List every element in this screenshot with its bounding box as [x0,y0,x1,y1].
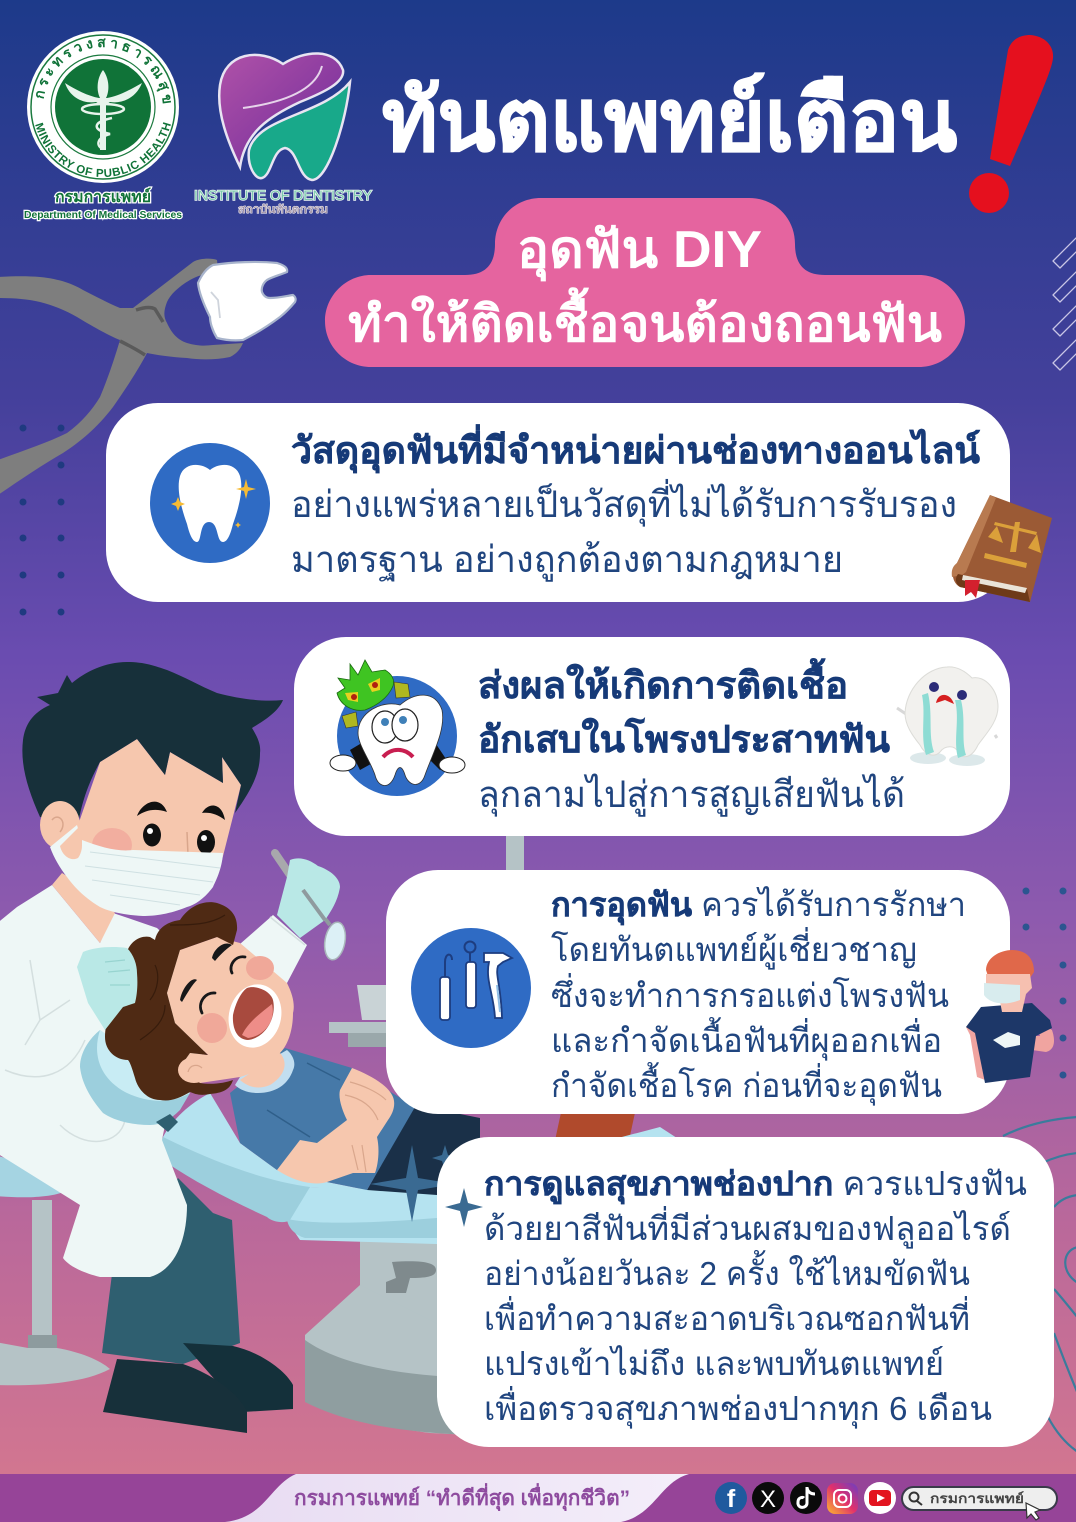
mirror tool [275,853,348,961]
subtitle banner: อุดฟัน DIY [517,221,762,282]
patient neck [235,1050,294,1093]
illustration: dentist treating a patient [0,662,680,1435]
icon: sparkling tooth [150,443,270,563]
panel: card 2 infection [294,637,1010,836]
chair seat [285,1127,680,1245]
decorative stripes top right [1053,236,1076,370]
search box [902,1487,1057,1520]
icon: dentist in scrubs [966,950,1054,1083]
dentist shoes [183,1343,293,1412]
text: card 1: มาตรฐาน อย่างถูกต้องตามกฎหมาย [291,539,843,582]
icon: YouTube [864,1482,896,1514]
icon: Instagram [827,1483,858,1514]
patient headrest [80,1030,190,1125]
text: card 3: ซึ่งจะทำการกรอแต่งโพรงฟัน [551,973,949,1014]
dentist neck [52,873,115,943]
logo: Institute of Dentistry: INSTITUTE OF DENTISTRY [194,187,373,203]
decorative dots left [20,424,64,616]
dentist hair [22,662,283,825]
logo: Ministry of Public Health: MINISTRY OF PUBLIC HEALTH [35,122,171,177]
icon: sparkle on card [445,1188,483,1227]
logo: Ministry of Public Health [23,31,183,222]
stool [0,1155,110,1385]
patient ear [178,1057,210,1083]
panel: card 1 materials sold online [106,403,1052,602]
text: card 4: ด้วยยาสีฟันที่มีส่วนผสมของฟลูออไรด์ [484,1206,1011,1249]
subtitle banner: ทำให้ติดเชื้อจนต้องถอนฟัน [348,287,942,352]
icon: law book [952,495,1052,602]
text: card 4: แปรงเข้าไม่ถึง และพบทันตแพทย์ [484,1345,944,1382]
chair back [163,1093,367,1218]
footer slogan: กรมการแพทย์ “ทำดีที่สุด เพื่อทุกชีวิต” [294,1482,630,1512]
text: card 3: และกำจัดเนื้อฟันที่ผุออกเพื่อ [551,1017,942,1061]
background tray and pole [329,830,524,1047]
sparkles [370,1145,458,1222]
footer bar [0,1474,1076,1522]
logo: Institute of Dentistry [194,53,373,216]
logo: Ministry of Public Health: กระทรวงสาธารณสุข [36,38,172,104]
text: card 4: อย่างน้อยวันละ 2 ครั้ง ใช้ไหมขัดฟัน [484,1250,970,1292]
text: card 4 [484,1165,1027,1429]
dentist glove right [277,858,340,938]
dentist cheek [92,828,132,862]
text: card 2 [478,658,905,817]
dentist brows and eyes [137,802,225,854]
text: card 4: เพื่อตรวจสุขภาพช่องปากทุก 6 เดือน [484,1386,992,1429]
text: card 3: โดยทันตแพทย์ผู้เชี่ยวชาญ [551,927,917,970]
logo: Institute of Dentistry: สถาบันทันตกรรม [238,204,328,216]
icon: facebook [715,1482,747,1514]
logo: Ministry of Public Health: กรมการแพทย์ [55,187,151,206]
icon: X [752,1482,784,1514]
dentist glove left [77,947,137,1030]
text: card 3: กำจัดเชื้อโรค ก่อนที่จะอุดฟัน [551,1062,942,1106]
patient arms [277,1068,394,1184]
icon: dental instruments [411,928,531,1048]
text: card 1 [291,424,980,582]
search box: กรมการแพทย์ [930,1491,1024,1506]
text: card 4: การดูแลสุขภาพช่องปาก ควรแปรงฟัน [484,1165,1027,1205]
patient trousers [367,1105,480,1195]
patient's feet [554,1108,636,1145]
icon: tooth with germ [330,660,465,796]
text: card 4: เพื่อทำความสะอาดบริเวณซอกฟันที่ [484,1296,970,1337]
patient mouth [222,978,288,1054]
text: card 3: การอุดฟัน ควรได้รับการรักษา [551,886,966,926]
chair base [305,1240,470,1435]
icon: TikTok [790,1482,822,1514]
dentist ear flap [60,828,82,859]
text: card 1: อย่างแพร่หลายเป็นวัสดุที่ไม่ได้รับการรับรอง [291,478,957,527]
patient shirt [230,1048,415,1190]
patient closed eyes and brows [200,957,245,1013]
icon: facebook: f [727,1485,736,1513]
icon: red exclamation mark [969,35,1053,213]
dentist mask [50,825,223,916]
text: card 2: ลุกลามไปสู่การสูญเสียฟันได้ [478,773,905,817]
dentist coat [0,885,307,1277]
illustration: forceps pulling a tooth [0,259,296,495]
panel: card 3 proper filling [386,870,1054,1114]
dentist trousers [102,1178,240,1364]
icon: crying tooth [897,667,998,766]
text: card 1: วัสดุอุดฟันที่มีจำหน่ายผ่านช่องทางออนไลน์ [291,424,980,474]
panel: card 4 oral care [437,1137,1054,1447]
patient cheeks [197,956,274,1043]
title: ทันตแพทย์เตือน [382,73,957,169]
text: card 2: อักเสบในโพรงประสาทฟัน [478,717,890,760]
decorative dots right [1022,888,1066,1078]
decorative arcs bottom right [1003,1117,1076,1452]
logo: Ministry of Public Health: Department Of Medical Services [24,209,182,221]
text: card 2: ส่งผลให้เกิดการติดเชื้อ [478,658,848,706]
dentist ear [40,801,80,849]
text: card 3 [551,886,966,1106]
patient face [167,937,294,1083]
dentist face [78,739,241,860]
icon: X: X [760,1486,776,1513]
patient hair [105,902,237,1101]
subtitle banner [325,198,965,367]
